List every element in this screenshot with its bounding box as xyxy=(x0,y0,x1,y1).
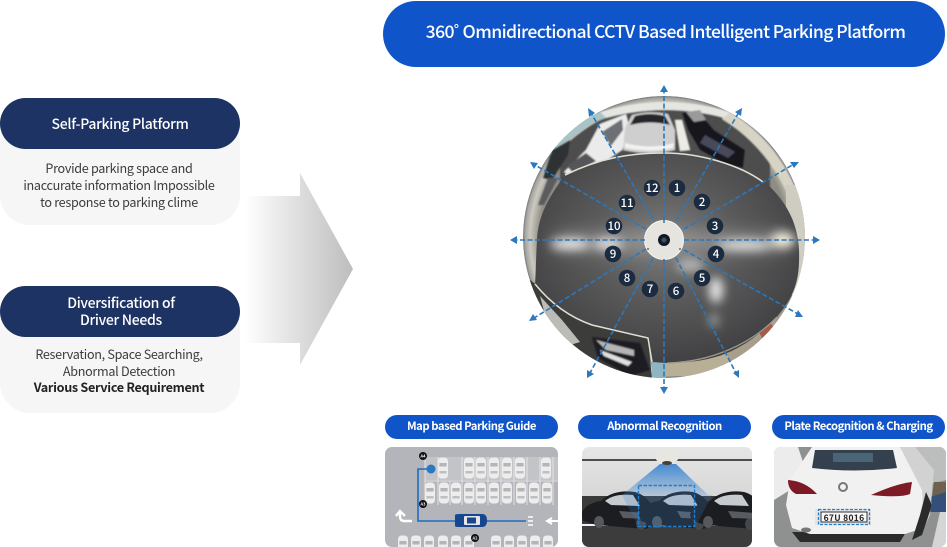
text block: driver needs description xyxy=(33,344,205,396)
numbered sectors 1 to 12: 1 xyxy=(674,180,680,196)
image: abnormal recognition camera scene xyxy=(581,447,767,547)
panel: driver needs card xyxy=(0,286,240,413)
numbered sectors 1 to 12 xyxy=(605,180,724,299)
map markers xyxy=(419,452,479,542)
arrow: grey gradient to platform xyxy=(245,173,353,365)
map markers: A3 xyxy=(420,502,426,508)
numbered sectors 1 to 12: 5 xyxy=(699,270,705,286)
numbered sectors 1 to 12: 3 xyxy=(712,218,718,234)
numbered sectors 1 to 12: 9 xyxy=(610,246,616,262)
heading: diversification of driver needs xyxy=(0,286,240,337)
text block: driver needs description: Reservation, Space Searching, xyxy=(35,344,203,363)
numbered sectors 1 to 12: 8 xyxy=(624,270,631,286)
direction arrows xyxy=(510,85,820,394)
numbered sectors 1 to 12: 11 xyxy=(620,195,634,211)
text block: self-parking description: inaccurate information Impossible xyxy=(23,175,215,194)
numbered sectors 1 to 12: 10 xyxy=(607,218,621,234)
text block: self-parking description: to response to parking clime xyxy=(40,192,198,211)
numbered sectors 1 to 12: 4 xyxy=(713,246,720,262)
text block: self-parking description: Provide parking space and xyxy=(45,158,193,177)
panel: self-parking card xyxy=(0,98,240,225)
label: plate recognition and charging: Plate Recognition & Charging xyxy=(784,418,933,434)
label: map based parking guide: Map based Parking Guide xyxy=(407,418,537,434)
title banner xyxy=(383,1,945,67)
text block: self-parking description xyxy=(23,158,215,211)
numbered sectors 1 to 12: 12 xyxy=(645,180,659,196)
title banner: 360˚ Omnidirectional CCTV Based Intelligent Parking Platform xyxy=(426,19,905,44)
numbered sectors 1 to 12: 2 xyxy=(699,194,705,210)
dome photo xyxy=(520,96,810,380)
image: plate recognition car xyxy=(774,447,946,547)
heading: diversification of driver needs: Driver Needs xyxy=(80,310,163,330)
label: plate recognition and charging xyxy=(772,415,945,439)
text block: driver needs description: Abnormal Detection xyxy=(63,361,175,380)
lower ring objects xyxy=(786,185,805,295)
camera unit xyxy=(644,220,684,260)
map markers: A2 xyxy=(472,536,478,542)
text block: driver needs description: Various Service Requirement xyxy=(33,377,205,396)
label: abnormal recognition: Abnormal Recognition xyxy=(606,418,722,434)
image: parking map xyxy=(385,447,558,547)
heading: self-parking platform: Self-Parking Platform xyxy=(51,114,189,134)
label: map based parking guide xyxy=(385,415,558,439)
parking floor xyxy=(535,153,799,363)
heading: diversification of driver needs: Diversification of xyxy=(67,293,176,313)
label: abnormal recognition xyxy=(578,415,751,439)
numbered sectors 1 to 12: 7 xyxy=(647,281,654,297)
chart: fisheye dome view with direction arrows xyxy=(510,85,820,394)
numbered sectors 1 to 12: 6 xyxy=(673,283,680,299)
image: plate recognition car: 67U 8016 xyxy=(824,512,864,524)
parked cars xyxy=(564,114,630,178)
heading: self-parking platform xyxy=(0,98,240,149)
floor light reflections xyxy=(555,234,785,250)
map markers: A4 xyxy=(420,454,426,460)
